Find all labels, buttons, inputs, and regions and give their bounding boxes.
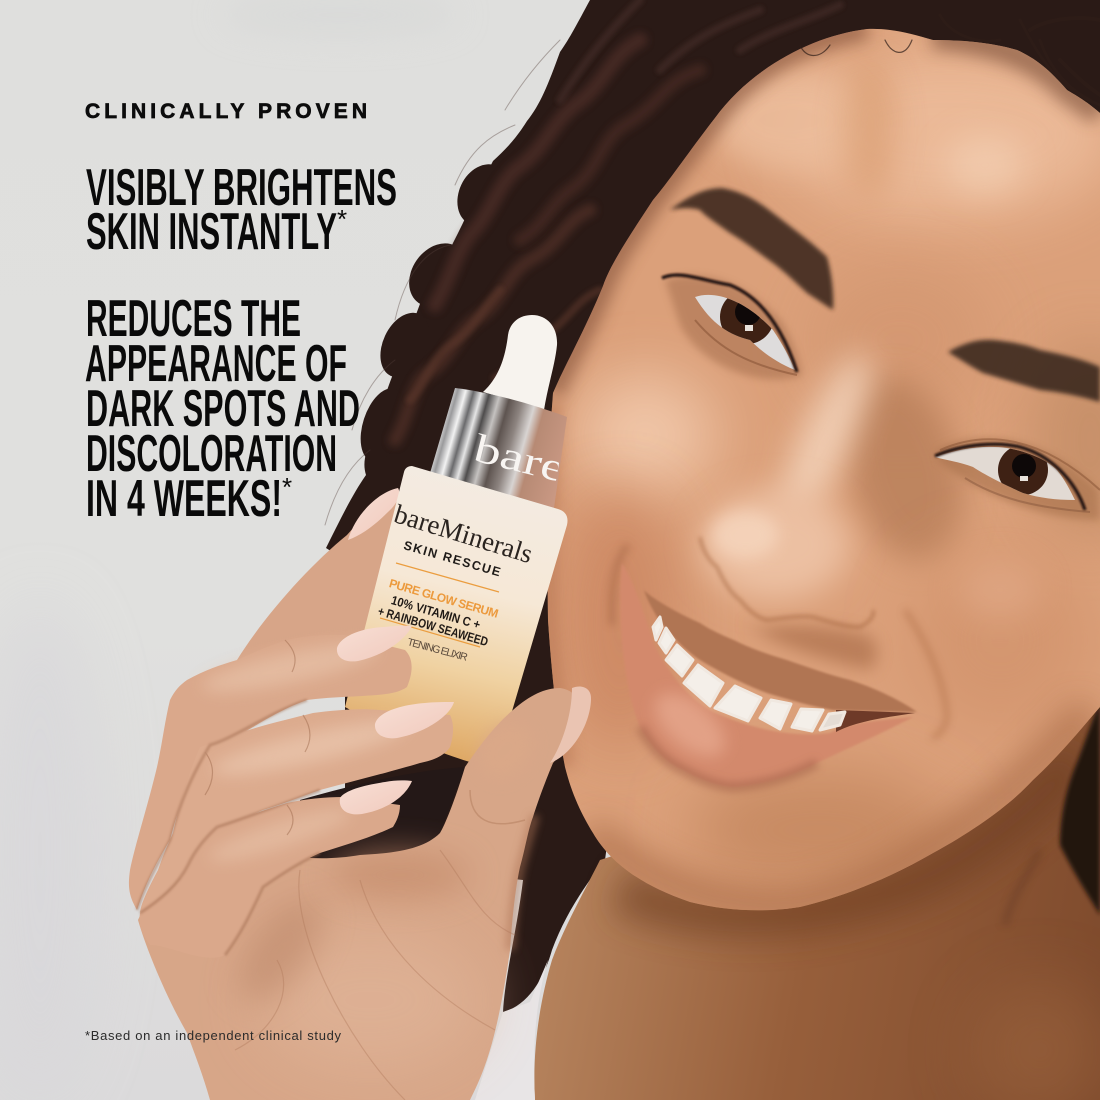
neck tendon — [1005, 850, 1040, 925]
jaw shade — [590, 710, 1090, 906]
nail: back finger — [348, 488, 399, 540]
headline: visibly brightens — [86, 159, 397, 261]
forehead — [780, 50, 1100, 220]
eye right — [935, 438, 1100, 520]
kicker: clinically proven: CLINICALLY PROVEN — [85, 100, 367, 123]
headline: reduces dark spots: DARK SPOTS AND — [86, 380, 360, 438]
headline: visibly brightens: SKIN INSTANTLY — [86, 203, 337, 261]
cheek contour near bottle — [548, 400, 565, 767]
serum bottle: 10% VITAMIN C + — [390, 593, 482, 632]
face — [548, 28, 1100, 910]
neck highlight — [970, 980, 1100, 1100]
nail: finger one — [337, 626, 412, 661]
headline: reduces dark spots — [85, 290, 360, 528]
nose bridge — [770, 344, 887, 508]
lower lip — [620, 563, 913, 787]
serum bottle: + RAINBOW SEAWEED — [376, 604, 490, 649]
shadow side of nose bridge — [844, 374, 972, 566]
nail: finger two — [375, 702, 454, 738]
between the brows — [810, 265, 990, 415]
right cheek — [936, 602, 1064, 704]
serum bottle: TENING ELIXIR — [406, 636, 469, 664]
hairline wisps — [800, 15, 1100, 105]
thumb nail — [550, 686, 591, 763]
serum bottle — [345, 315, 570, 765]
finger two — [140, 709, 453, 913]
chin — [690, 770, 950, 890]
nose tip — [700, 490, 850, 600]
headline: reduces dark spots: * — [282, 472, 292, 502]
dropper bulb — [483, 315, 557, 410]
smile fold — [905, 610, 947, 738]
eye left — [662, 275, 802, 379]
white top — [475, 960, 548, 1100]
shadow under jaw — [620, 760, 1075, 914]
palm shading — [260, 930, 480, 1070]
headline: visibly brightens: VISIBLY BRIGHTENS — [86, 159, 397, 217]
hair right side — [1060, 700, 1100, 915]
hairline shadow — [553, 29, 867, 393]
headline: reduces dark spots: DISCOLORATION — [86, 425, 337, 483]
flyaway strands — [325, 40, 560, 525]
shadow on thumb side — [510, 815, 535, 950]
nail: finger three — [340, 780, 412, 814]
nose — [700, 537, 877, 670]
hair — [325, 0, 1100, 1012]
hand palm and thumb — [138, 688, 580, 1100]
label text: bareMinerals — [391, 499, 536, 569]
hair edge waves — [352, 156, 518, 467]
finger creases — [137, 640, 320, 955]
headline: reduces dark spots: REDUCES THE — [86, 290, 301, 348]
serum bottle: SKIN RESCUE — [402, 538, 502, 579]
hair patch between fingers and palm — [300, 767, 465, 870]
hair highlights — [325, 0, 840, 525]
serum bottle: PURE GLOW SERUM — [388, 576, 500, 621]
finger one — [129, 635, 412, 910]
upper lip — [644, 590, 917, 712]
metal collar — [428, 388, 567, 515]
finger three — [139, 797, 400, 958]
headline: visibly brightens: * — [337, 204, 347, 234]
mouth interior — [836, 710, 915, 732]
neck and chest — [475, 700, 1100, 1100]
left cheek — [575, 373, 715, 497]
bottle body — [345, 466, 568, 765]
headline: reduces dark spots: APPEARANCE OF — [85, 335, 347, 393]
footnote: *Based on an independent clinical study — [85, 1028, 342, 1043]
collar text: bare — [470, 425, 570, 491]
eyebrow right — [948, 340, 1100, 402]
headline: reduces dark spots: IN 4 WEEKS! — [86, 470, 282, 528]
teeth — [653, 617, 845, 731]
back finger behind bottle — [237, 488, 400, 680]
eyebrow left — [670, 188, 833, 310]
